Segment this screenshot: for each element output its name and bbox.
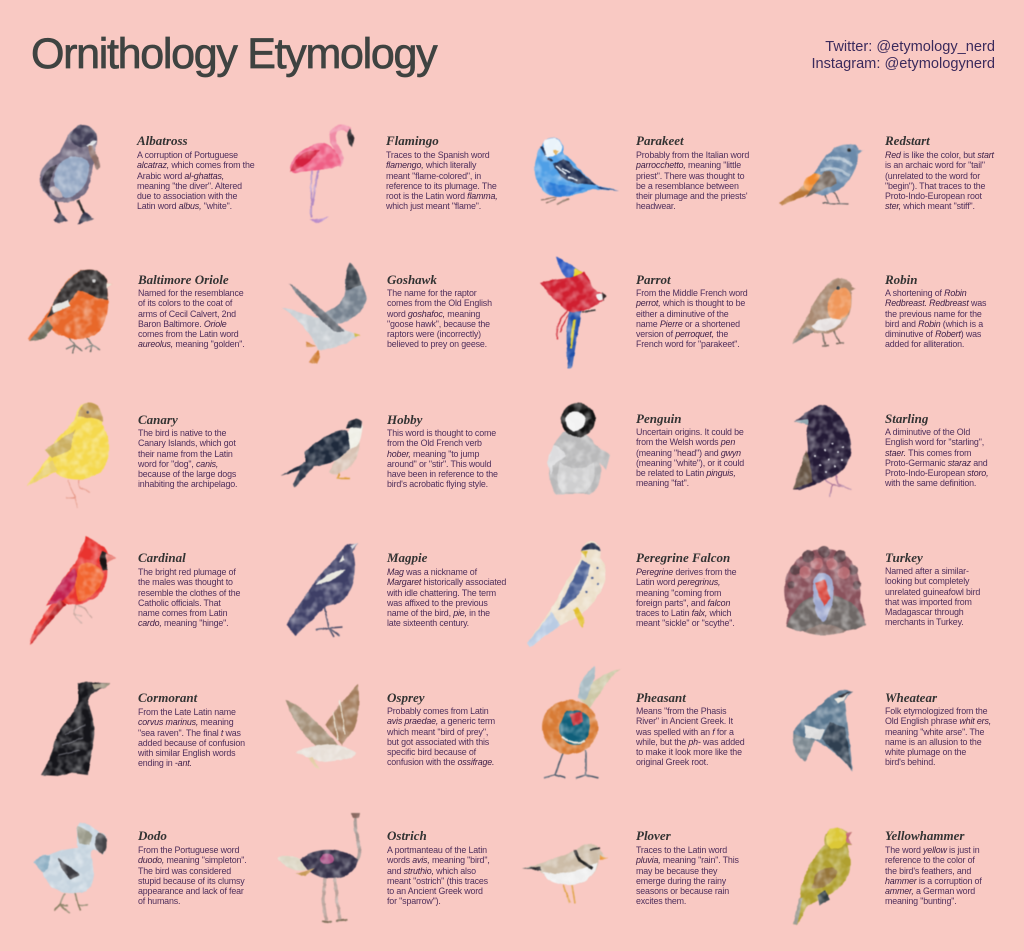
panel: robin <box>792 272 986 349</box>
text block: flamengo, which literally <box>386 160 476 170</box>
text block: Folk etymologized from the <box>885 706 987 716</box>
panel: goshawk <box>282 262 492 364</box>
icon: starling <box>792 404 852 498</box>
icon: robin <box>792 278 856 348</box>
text block: French word for "parakeet". <box>636 339 740 349</box>
text block: alcatraz, which comes from the <box>137 160 255 170</box>
text block: meaning "coming from <box>636 588 721 598</box>
panel: parakeet <box>534 133 749 211</box>
social handles <box>811 39 995 72</box>
text block <box>885 845 982 907</box>
heading: Flamingo <box>386 133 439 148</box>
text block: was spelled with an f for a <box>636 727 734 737</box>
text block: River" in Ancient Greek. It <box>636 716 733 726</box>
text block: name is an allusion to the <box>885 737 982 747</box>
text block: excites them. <box>636 896 686 906</box>
text block <box>885 288 986 349</box>
text block: Probably comes from Latin <box>387 706 489 716</box>
text block: be a resemblance between <box>636 181 739 191</box>
text block: Old English phrase whit ers, <box>885 716 991 726</box>
text block: reference to its plumage. The <box>386 181 497 191</box>
panel: yellowhammer <box>772 810 1021 925</box>
text block: The bird was considered <box>138 866 231 876</box>
icon: flamingo <box>290 124 356 224</box>
text block <box>137 150 255 211</box>
text block: Proto-Indo-European storo, <box>885 468 988 478</box>
text block: Red is like the color, but start <box>885 150 994 160</box>
heading: Turkey <box>885 550 923 565</box>
text block: parrocchetto, meaning "little <box>636 160 741 170</box>
text block: "sea raven". The final t was <box>138 728 241 738</box>
text block: because of the large dogs <box>138 469 236 479</box>
text block: merchants in Turkey. <box>885 617 964 627</box>
text block: A shortening of Robin <box>885 288 967 298</box>
heading: Canary <box>138 412 178 427</box>
text block: bird's acrobatic flying style. <box>387 479 488 489</box>
text block <box>636 845 739 907</box>
text block: specific bird because of <box>387 747 476 757</box>
text block: bird's behind. <box>885 757 935 767</box>
text block: Canary Islands, which got <box>138 438 236 448</box>
text block: duodo, meaning "simpleton". <box>138 855 247 865</box>
icon: wheatear <box>772 664 1021 782</box>
panel: dodo <box>25 810 274 925</box>
heading: Robin <box>885 272 918 287</box>
heading: Baltimore Oriole <box>138 272 229 287</box>
text block: Baron Baltimore. Oriole <box>138 319 227 329</box>
icon: pheasant <box>523 664 772 782</box>
text block: A diminutive of the Old <box>885 427 970 437</box>
text block: the males was thought to <box>138 577 233 587</box>
text block: added for alliteration. <box>885 339 964 349</box>
text block: Catholic officials. That <box>138 598 221 608</box>
text block: arms of Cecil Calvert, 2nd <box>138 309 236 319</box>
panel: hobby <box>280 412 498 489</box>
text block <box>885 706 991 768</box>
text block: Proto-Germanic staraz and <box>885 458 988 468</box>
text block <box>387 845 490 907</box>
text block: is an archaic word for "tail" <box>885 160 985 170</box>
text block <box>138 567 240 628</box>
text block: From the Middle French word <box>636 288 748 298</box>
text block: from the Old French verb <box>387 438 482 448</box>
icon: goshawk <box>282 262 368 364</box>
text block: with similar English words <box>138 748 235 758</box>
text block: headwear. <box>636 201 676 211</box>
text block: A corruption of Portuguese <box>137 150 238 160</box>
text block: (meaning "white"), or it could <box>636 458 744 468</box>
text block <box>636 706 745 768</box>
text block: and struthio, which also <box>387 866 476 876</box>
text block: A portmanteau of the Latin <box>387 845 487 855</box>
text block: of humans. <box>138 896 180 906</box>
text block: reference to the color of <box>885 855 975 865</box>
text block: their plumage and the priests' <box>636 191 747 201</box>
text block: meant "ostrich" (this traces <box>387 876 488 886</box>
text block: around" or "stir". This would <box>387 459 491 469</box>
panel: cormorant <box>25 664 274 782</box>
heading: Penguin <box>636 411 682 426</box>
text block: the bird's feathers, and <box>885 866 971 876</box>
text block: Proto-Indo-European root <box>885 191 982 201</box>
text block: The name for the raptor <box>387 288 477 298</box>
text block: Named for the resemblance <box>138 288 244 298</box>
text block <box>636 288 748 349</box>
heading: Goshawk <box>387 272 437 287</box>
text block: which just meant "flame". <box>386 201 481 211</box>
icon: plover <box>523 810 772 925</box>
text block: diminutive of Robert) was <box>885 329 981 339</box>
text block: late sixteenth century. <box>387 618 469 628</box>
text block: meaning "the diver". Altered <box>137 181 242 191</box>
text block: word for "dog", canis, <box>138 459 218 469</box>
text block: avis praedae, a generic term <box>387 716 495 726</box>
icon: dodo <box>25 810 274 925</box>
text block: to an Ancient Greek word <box>387 886 483 896</box>
panel: osprey <box>274 664 523 782</box>
text block: ster, which meant "stiff". <box>885 201 975 211</box>
text block: The bird is native to the <box>138 428 226 438</box>
panel: pheasant <box>523 664 772 782</box>
title: Ornithology Etymology <box>31 30 436 78</box>
text block: may be because they <box>636 866 717 876</box>
text block: meaning "white arse". The <box>885 727 984 737</box>
text block: raptors were (incorrectly) <box>387 329 481 339</box>
text block: Madagascar through <box>885 607 964 617</box>
text block: "begin"). That traces to the <box>885 181 985 191</box>
text block: their name from the Latin <box>138 449 233 459</box>
icon: parakeet <box>534 136 619 206</box>
text block: "goose hawk", because the <box>387 319 490 329</box>
text block <box>138 288 245 349</box>
text block: comes from the Old English <box>387 298 492 308</box>
icon: canary <box>26 402 110 508</box>
text block <box>885 427 988 488</box>
text block: Latin word peregrinus, <box>636 577 720 587</box>
heading: Wheatear <box>885 690 937 705</box>
heading: Yellowhammer <box>885 828 964 843</box>
icon: yellowhammer <box>772 810 1021 925</box>
text block: comes from the Latin word <box>138 329 239 339</box>
text block: hammer is a corruption of <box>885 876 982 886</box>
text block: Redbreast. Redbreast was <box>885 298 986 308</box>
text block: bird and Robin (which is a <box>885 319 983 329</box>
text block: priest". There was thought to <box>636 171 744 181</box>
text block: Uncertain origins. It could be <box>636 427 744 437</box>
text block: meant "flame-colored", in <box>386 171 481 181</box>
text block: Traces to the Latin word <box>636 845 727 855</box>
social handles: Instagram: @etymologynerd <box>811 56 995 72</box>
text block: looking but completely <box>885 576 969 586</box>
text block: hober, meaning "to jump <box>387 449 479 459</box>
text block: Probably from the Italian word <box>636 150 749 160</box>
text block: appearance and lack of fear <box>138 886 244 896</box>
text block: root is the Latin word flamma, <box>386 191 498 201</box>
text block: white plumage on the <box>885 747 966 757</box>
text block: inhabiting the archipelago. <box>138 479 237 489</box>
text block: confusion with the ossifrage. <box>387 757 494 767</box>
heading: Pheasant <box>636 690 686 705</box>
text block: but got associated with this <box>387 737 489 747</box>
text block: which meant "bird of prey", <box>387 727 488 737</box>
text block <box>387 428 498 489</box>
text block: Named after a similar- <box>885 566 969 576</box>
heading: Parrot <box>636 272 671 287</box>
text block: (meaning "head") and gwyn <box>636 448 741 458</box>
panel: wheatear <box>772 664 1021 782</box>
text block <box>885 150 994 211</box>
text block: The word yellow is just in <box>885 845 980 855</box>
text block: either a diminutive of the <box>636 309 729 319</box>
icon: ostrich <box>274 810 523 925</box>
text block: stupid because of its clumsy <box>138 876 245 886</box>
panel: parrot <box>540 256 748 370</box>
icon: osprey <box>274 664 523 782</box>
text block: corvus marinus, meaning <box>138 717 233 727</box>
text block: Latin word albus, "white". <box>137 201 232 211</box>
text block <box>386 150 498 211</box>
panel: baltimore oriole <box>28 268 245 354</box>
panel: penguin <box>547 402 744 495</box>
text block: have been in reference to the <box>387 469 498 479</box>
text block: This word is thought to come <box>387 428 496 438</box>
text block: ammer, a German word <box>885 886 975 896</box>
panel: canary <box>26 402 237 508</box>
text block: Mag was a nickname of <box>387 567 477 577</box>
text block: word goshafoc, meaning <box>387 309 480 319</box>
icon: cormorant <box>25 664 274 782</box>
text block: meaning "fat". <box>636 478 689 488</box>
heading: Peregrine Falcon <box>636 550 730 565</box>
panel: magpie <box>274 533 523 650</box>
text block: (unrelated to the word for <box>885 171 980 181</box>
text block: perrot, which is thought to be <box>636 298 745 308</box>
icon: penguin <box>547 402 610 495</box>
text block <box>138 428 237 489</box>
text block: ending in -ant. <box>138 758 192 768</box>
text block: of its colors to the coat of <box>138 298 232 308</box>
text block <box>387 567 506 629</box>
text block: staer. This comes from <box>885 448 971 458</box>
heading: Albatross <box>137 133 188 148</box>
text block: be related to Latin pinguis, <box>636 468 736 478</box>
panel: cardinal <box>30 536 240 646</box>
heading: Dodo <box>138 828 167 843</box>
text block: meant "sickle" or "scythe". <box>636 618 735 628</box>
panel: peregrine falcon <box>523 533 772 650</box>
text block: believed to prey on geese. <box>387 339 487 349</box>
text block: seasons or because rain <box>636 886 729 896</box>
text block: was affixed to the previous <box>387 598 488 608</box>
text block <box>636 427 744 488</box>
heading: Redstart <box>885 133 930 148</box>
text block: version of perroquet, the <box>636 329 728 339</box>
text block: From the Late Latin name <box>138 707 236 717</box>
text block: that was imported from <box>885 597 972 607</box>
icon: cardinal <box>30 536 116 646</box>
panel: flamingo <box>290 124 498 224</box>
text block: Arabic word al-ghattas, <box>137 171 224 181</box>
text block: original Greek root. <box>636 757 708 767</box>
icon: turkey <box>772 533 1021 650</box>
text block: resemble the clothes of the <box>138 588 240 598</box>
text block: due to association with the <box>137 191 237 201</box>
text block: pluvia, meaning "rain". This <box>636 855 739 865</box>
heading: Magpie <box>387 550 427 565</box>
panel: ostrich <box>274 810 523 925</box>
text block: added because of confusion <box>138 738 245 748</box>
panel: turkey <box>772 533 1021 650</box>
text block <box>636 567 736 629</box>
panel: redstart <box>778 133 994 211</box>
icon: parrot <box>540 256 607 370</box>
text block <box>138 845 247 907</box>
text block <box>636 150 749 211</box>
text block: with the same definition. <box>885 478 976 488</box>
text block: cardo, meaning "hinge". <box>138 618 228 628</box>
text block: name of the bird, pie, in the <box>387 608 490 618</box>
heading: Parakeet <box>636 133 684 148</box>
heading: Cardinal <box>138 550 186 565</box>
heading: Starling <box>885 411 928 426</box>
text block: for "sparrow"). <box>387 896 441 906</box>
text block: Margaret historically associated <box>387 577 506 587</box>
text block: name comes from Latin <box>138 608 227 618</box>
heading: Cormorant <box>138 690 197 705</box>
text block: the previous name for the <box>885 309 982 319</box>
text block: Traces to the Spanish word <box>386 150 490 160</box>
icon: baltimore oriole <box>28 268 111 354</box>
text block: aureolus, meaning "golden". <box>138 339 245 349</box>
icon: magpie <box>274 533 523 650</box>
text block: unrelated guineafowl bird <box>885 587 980 597</box>
text block: from the Welsh words pen <box>636 437 735 447</box>
text block: From the Portuguese word <box>138 845 239 855</box>
text block <box>138 707 245 769</box>
text block: traces to Latin falx, which <box>636 608 731 618</box>
heading: Plover <box>636 828 671 843</box>
icon: albatross <box>39 124 101 225</box>
icon: hobby <box>280 418 363 488</box>
heading: Ostrich <box>387 828 427 843</box>
text block <box>387 706 495 768</box>
text block <box>387 288 492 349</box>
text block: The bright red plumage of <box>138 567 236 577</box>
text block: emerge during the rainy <box>636 876 726 886</box>
panel: starling <box>792 404 988 498</box>
social handles: Twitter: @etymology_nerd <box>825 39 995 55</box>
text block: to make it look more like the <box>636 747 742 757</box>
text block: name Pierre or a shortened <box>636 319 740 329</box>
text block: with idle chattering. The term <box>387 588 496 598</box>
text block: meaning "bunting". <box>885 896 957 906</box>
panel: plover <box>523 810 772 925</box>
text block: English word for "starling", <box>885 437 984 447</box>
text block: Means "from the Phasis <box>636 706 726 716</box>
text block: words avis, meaning "bird", <box>387 855 490 865</box>
heading: Osprey <box>387 690 425 705</box>
heading: Hobby <box>387 412 422 427</box>
icon: redstart <box>778 144 863 206</box>
panel: albatross <box>39 124 255 225</box>
icon: peregrine falcon <box>523 533 772 650</box>
text block: while, but the ph- was added <box>636 737 745 747</box>
text block: foreign parts", and falcon <box>636 598 730 608</box>
text block <box>885 566 980 628</box>
text block: Peregrine derives from the <box>636 567 736 577</box>
